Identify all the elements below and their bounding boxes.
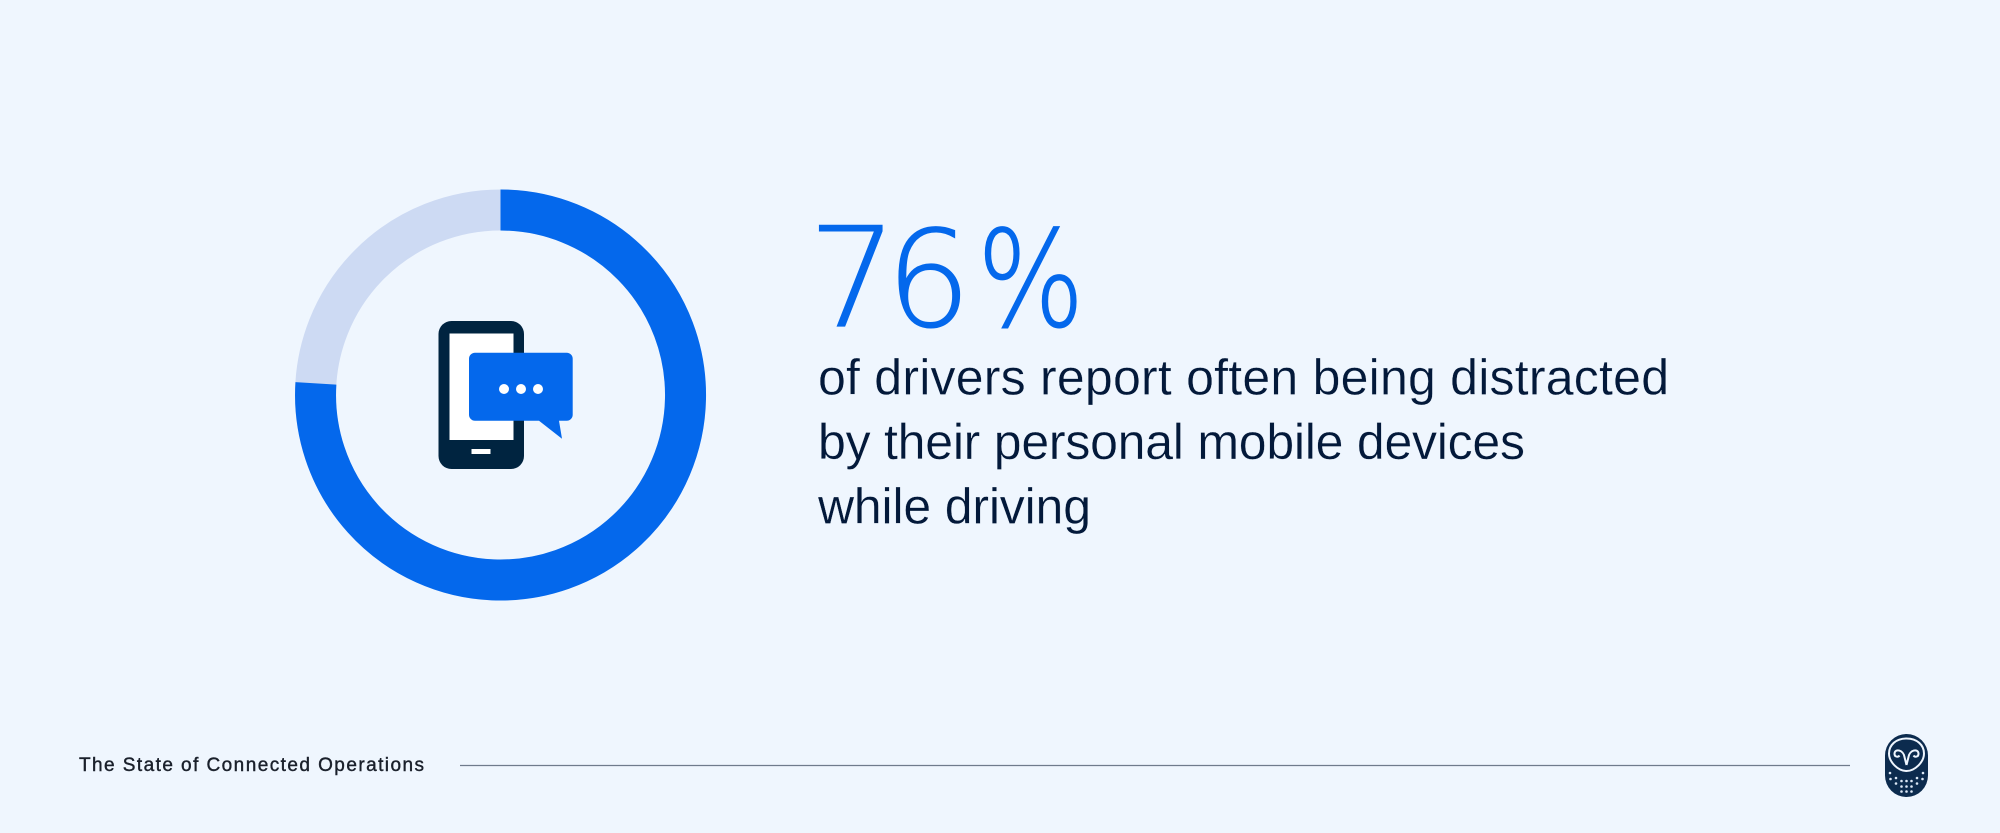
statistic: 76%: 6: [886, 202, 971, 358]
icon: phone with chat bubble: [438, 321, 573, 469]
description text: of drivers report often being distracted: [818, 350, 1669, 406]
statistic: 76%: %: [977, 203, 1085, 358]
statistic: 76%: [808, 198, 1085, 359]
description text: while driving: [817, 478, 1091, 534]
statistic: 76%: 7: [808, 198, 898, 359]
donut chart: 76 percent: [316, 210, 686, 580]
description text: by their personal mobile devices: [818, 414, 1525, 470]
description text: [817, 350, 1669, 534]
footer label: The State of Connected Operations: [79, 755, 424, 776]
icon: owl logo: [1885, 734, 1928, 797]
